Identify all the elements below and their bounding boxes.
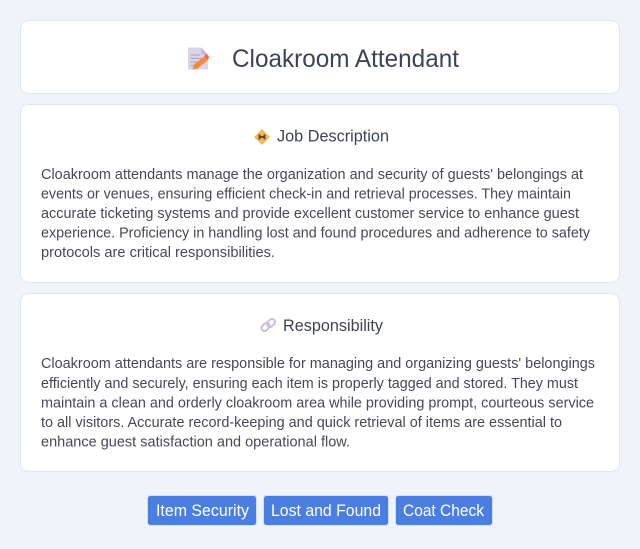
- text block: job description: experience. Proficiency in handling lost and found procedures and adherence to safety: [41, 226, 591, 242]
- panel: job description: [20, 104, 620, 282]
- tag: lost and found: Lost and Found: [271, 502, 381, 520]
- text block: job description: Cloakroom attendants manage the organization and security of guests' belongings at: [41, 167, 583, 183]
- tag: item security: Item Security: [156, 502, 250, 520]
- title: Cloakroom Attendant: [232, 45, 459, 73]
- tag: coat check: [396, 496, 492, 526]
- icon: diamond sign: [254, 129, 270, 145]
- icon: document with pencil: [188, 48, 210, 70]
- text block: responsibility: [41, 356, 595, 450]
- text block: responsibility: Cloakroom attendants are responsible for managing and organizing guests' belongings: [41, 356, 595, 372]
- text block: responsibility: maintain a clean and orderly cloakroom area while providing prompt, courteous service: [41, 396, 594, 412]
- tag: coat check: Coat Check: [403, 502, 485, 520]
- panel: title card: [20, 20, 620, 94]
- text block: job description: [41, 167, 591, 261]
- heading: responsibility: Responsibility: [283, 317, 384, 335]
- text block: job description: events or venues, ensuring efficient check-in and retrieval processes. They maintain: [41, 186, 571, 202]
- tag: lost and found: [264, 496, 388, 526]
- text block: responsibility: enhance guest satisfaction and operational flow.: [41, 434, 350, 450]
- icon: chain link: [260, 318, 276, 332]
- text block: job description: accurate ticketing systems and provide excellent customer service to enhance guest: [41, 206, 579, 222]
- text block: responsibility: efficiently and securely, ensuring each item is properly tagged and stored. They must: [41, 376, 578, 392]
- panel: responsibility: [20, 294, 620, 472]
- tag: item security: [148, 496, 256, 526]
- text block: job description: protocols are critical responsibilities.: [41, 245, 275, 261]
- heading: job description: Job Description: [277, 128, 389, 146]
- text block: responsibility: to all visitors. Accurate record-keeping and quick retrieval of items are essential to: [41, 415, 562, 431]
